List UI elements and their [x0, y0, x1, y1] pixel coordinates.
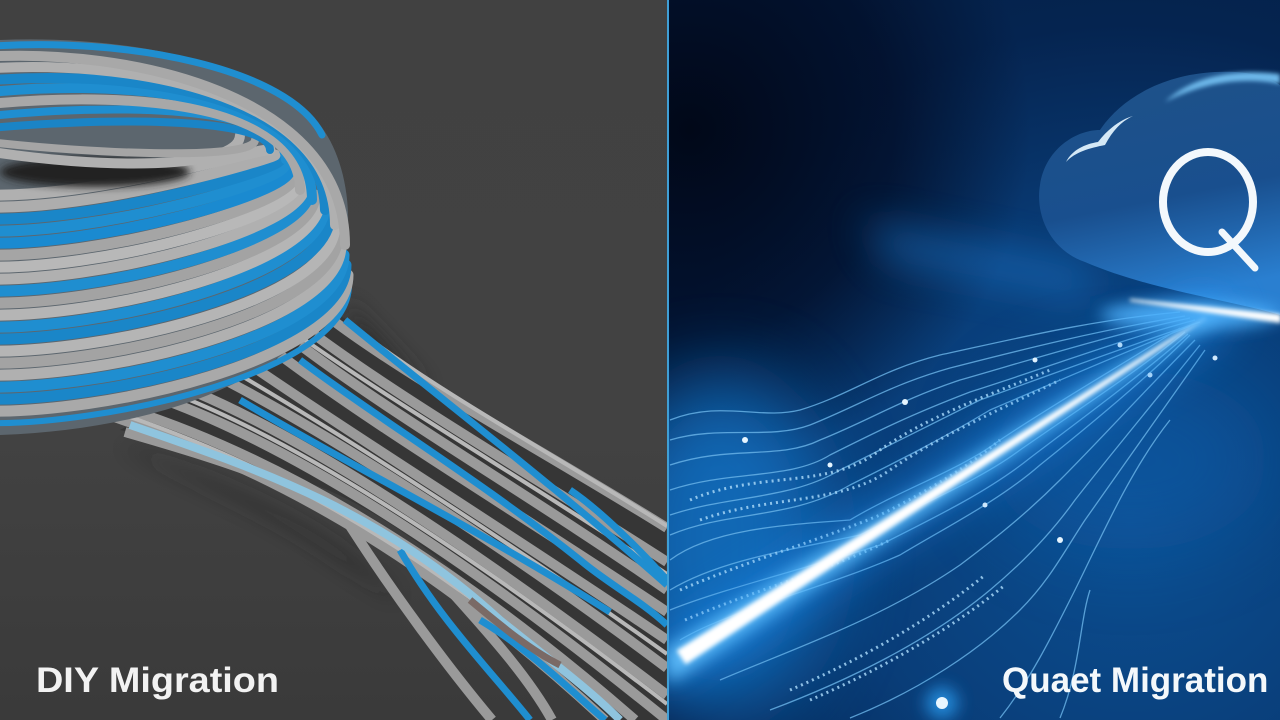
circuit dots band: [680, 370, 1060, 700]
label: Quaet Migration: Quaet Migration: [1002, 661, 1268, 700]
circuit traces: [670, 312, 1205, 718]
coil hole: [0, 157, 190, 187]
background glow: [610, 220, 1270, 715]
bottom glow node: [926, 687, 958, 719]
icon: cloud with Q: [1039, 72, 1280, 315]
cable strands: loose bundle: [100, 315, 667, 720]
coil base: [0, 39, 348, 435]
panel: DIY migration: [0, 0, 667, 720]
label: DIY Migration: DIY Migration: [36, 661, 279, 700]
panel: Quaet migration: [610, 0, 1280, 720]
light beam: [670, 300, 1280, 676]
light nodes: [742, 342, 1218, 543]
Q glyph: [1163, 152, 1255, 268]
bundle underlay: [120, 316, 666, 576]
cable shadow: [266, 316, 404, 561]
cable coil: upper rings: [0, 45, 345, 245]
divider: [667, 0, 669, 720]
cable coil: lower rings: [0, 150, 349, 423]
